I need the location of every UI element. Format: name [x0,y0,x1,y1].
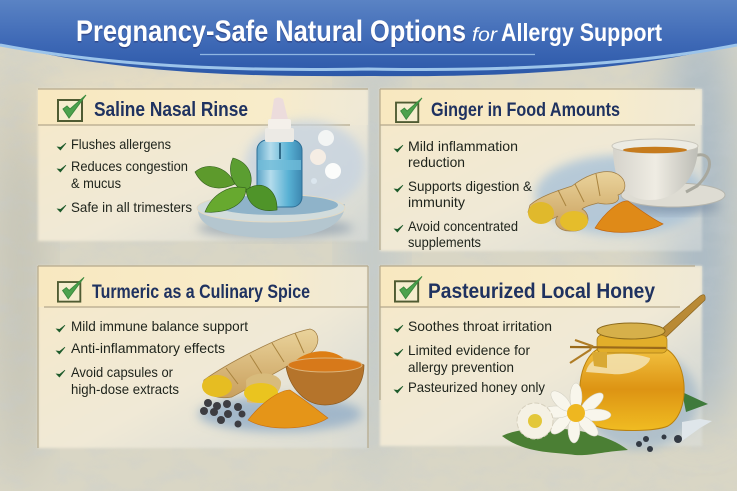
bullet list: Avoid capsules or [71,364,173,380]
illustration: honey jar, dipper and daisies [502,295,712,455]
icon: checkbox [395,276,422,302]
panel: pasteurized local honey [380,266,712,455]
illustration: tea cup with ginger and turmeric [528,139,725,235]
title: for [472,25,498,46]
bullet list: reduction [408,154,465,170]
title: Allergy Support [501,19,663,47]
bullet list: immunity [408,194,465,210]
title: Pregnancy-Safe Natural Options [76,15,466,48]
bullet list: Pasteurized honey only [408,379,545,395]
heading: saline: Saline Nasal Rinse [94,99,248,121]
panel: ginger in food amounts [380,89,725,251]
bullet list: allergy prevention [408,359,514,375]
bullet list: Supports digestion & [408,178,533,194]
bullet list: & mucus [71,175,121,191]
header banner [0,0,737,76]
illustration: turmeric root, bowl, powder and pepper [198,329,364,432]
bullet list: Avoid concentrated [408,218,518,234]
bullet list: Anti-inflammatory effects [71,340,225,356]
bullet list [394,318,552,395]
icon: checkbox [58,277,84,302]
bullet list: Safe in all trimesters [71,199,192,215]
bullet list: supplements [408,234,481,250]
bullet list: high-dose extracts [71,381,179,397]
icon: checkbox [58,95,86,121]
icon: checkbox [396,98,422,122]
title: Pregnancy-Safe Natural Options [76,16,466,50]
illustration: saline bottle on dish with leaves [195,98,365,238]
bullet list: Flushes allergens [71,136,171,152]
bullet list [394,138,533,250]
bullet list [56,318,248,397]
bullet list: Mild immune balance support [71,318,248,334]
panel: turmeric as a culinary spice [38,266,368,448]
bullet list [58,136,192,215]
bullet list: Soothes throat irritation [408,318,552,334]
heading: honey: Pasteurized Local Honey [428,280,655,303]
heading: turmeric: Turmeric as a Culinary Spice [92,282,310,303]
bullet list: Limited evidence for [408,342,530,358]
heading: ginger: Ginger in Food Amounts [431,100,620,121]
bullet list: Reduces congestion [71,158,188,174]
bullet list: Mild inflammation [408,138,518,154]
panel: saline nasal rinse [38,89,368,241]
